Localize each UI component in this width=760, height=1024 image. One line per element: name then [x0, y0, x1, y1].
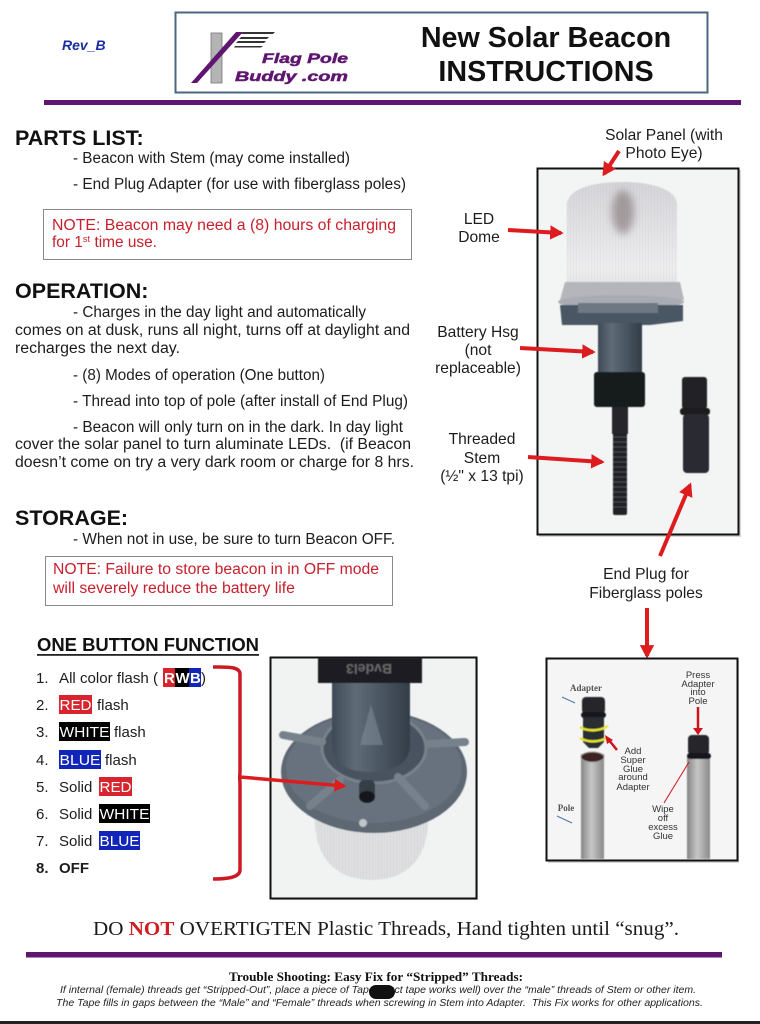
lens [315, 820, 428, 880]
note: charging: time use. [90, 234, 157, 251]
small labels: Pole [688, 696, 708, 707]
mode 1 [36, 668, 206, 687]
small arrows [557, 697, 703, 823]
troubleshooting: The Tape fills in gaps between the “Male” and “Female” threads when screwing in Stem into Adapter. This Fix works for other applications. [56, 997, 703, 1009]
mode 6: 6. [36, 806, 49, 823]
list: button modes [36, 668, 206, 877]
mode 8: 8. [36, 860, 49, 877]
mode 1: B [190, 670, 201, 687]
mode 1: ) [201, 670, 206, 687]
section: operation [15, 279, 414, 471]
label: battery housing: Battery Hsg [437, 324, 519, 341]
threaded stem [613, 433, 627, 515]
mode 6: Solid [59, 806, 92, 823]
section: operation: - Charges in the day light and automatically [73, 304, 366, 321]
right pole [687, 754, 710, 859]
troubleshooting: Trouble Shooting: Easy Fix for “Stripped” Threads: [229, 969, 523, 984]
small labels: into [690, 687, 706, 698]
collar [318, 658, 422, 683]
small labels: off [658, 813, 669, 824]
mode 4: 4. [36, 752, 49, 769]
arrow: end plug up [660, 485, 690, 556]
mode 5: 5. [36, 779, 49, 796]
section: operation: recharges the next day. [15, 340, 180, 357]
mode 7 [36, 831, 140, 850]
title: INSTRUCTIONS [438, 56, 654, 88]
redaction blob [369, 985, 395, 999]
section: parts list: - End Plug Adapter (for use with fiberglass poles) [73, 176, 406, 193]
dome [567, 182, 677, 285]
note: storage warning: NOTE: Failure to store beacon in in OFF mode [53, 561, 379, 578]
troubleshooting: If internal (female) threads get “Stripped-Out”, place a piece of Tape (Duct tape works well) over the “male” threads of Stem or other item. [60, 984, 696, 996]
arrow: end plug down [645, 608, 649, 656]
section: storage: STORAGE: [15, 506, 128, 530]
section: operation: cover the solar panel to turn aluminate LEDs. (if Beacon [15, 436, 411, 453]
label: solar panel: Solar Panel (with [605, 127, 723, 144]
label: battery housing: (not [465, 342, 492, 359]
label: threaded stem [440, 431, 524, 485]
small labels: Add [625, 746, 641, 757]
label: end plug [589, 566, 703, 602]
note: storage warning: will severely reduce the battery life [52, 580, 295, 597]
label: threaded stem: (½" x 13 tpi) [440, 468, 524, 485]
heading: one button function: ONE BUTTON FUNCTION [37, 634, 259, 655]
note: charging [44, 210, 412, 260]
mode 7: BLUE [100, 833, 140, 850]
arrow: battery housing [520, 348, 593, 352]
small labels: Adapter [681, 679, 715, 690]
small labels: Press [686, 670, 710, 681]
mode 5: RED [100, 779, 132, 796]
section: parts list: - Beacon with Stem (may come installed) [73, 150, 350, 167]
mode 8 [36, 860, 89, 877]
label: end plug: Fiberglass poles [589, 585, 703, 602]
small labels: Super [620, 755, 646, 766]
bracket [213, 667, 240, 879]
label: LED dome: Dome [458, 229, 500, 246]
small labels: around [618, 772, 648, 783]
beacon photo panel [538, 168, 741, 537]
mode 1: All color flash ( [59, 670, 158, 687]
revision label: Rev_B [62, 37, 106, 53]
collar [594, 372, 645, 407]
screw [359, 819, 367, 827]
button [359, 780, 375, 800]
mode 3: WHITE [60, 724, 110, 741]
logo: Flag Pole Buddy [191, 32, 348, 84]
base [560, 305, 683, 325]
button photo panel: Bvdel3 [346, 661, 392, 677]
mode 1: W [176, 670, 190, 687]
mode 6: WHITE [100, 806, 150, 823]
mode 7: Solid [59, 833, 92, 850]
base disc [281, 711, 467, 833]
ribs [283, 735, 465, 806]
label: end plug: End Plug for [603, 566, 689, 583]
arrow: solar panel [604, 151, 619, 174]
label: solar panel: Photo Eye) [625, 145, 703, 162]
logo: Flag Pole Buddy: Buddy .com [235, 68, 348, 84]
section: operation: comes on at dusk, runs all night, turns off at daylight and [15, 322, 410, 339]
mode 2: 2. [36, 697, 49, 714]
arrow: threaded stem [528, 457, 602, 462]
mode 5: Solid [59, 779, 92, 796]
button photo panel [270, 658, 478, 900]
small labels [558, 670, 715, 842]
section: operation: OPERATION: [15, 279, 148, 303]
small labels: Glue [623, 764, 643, 775]
mode 5 [36, 777, 132, 796]
header banner [176, 12, 708, 92]
label: battery housing: replaceable) [435, 360, 521, 377]
note: storage warning [46, 556, 392, 606]
label: threaded stem: Threaded [449, 431, 515, 448]
small labels: Pole [558, 803, 574, 813]
mode 2 [36, 695, 129, 714]
ring [322, 713, 426, 783]
pole install panel [546, 658, 739, 863]
mode 3: flash [114, 724, 146, 741]
title [421, 22, 671, 88]
logo: Flag Pole Buddy: Flag Pole [262, 50, 348, 66]
small labels: Adapter [616, 782, 650, 793]
mode 1: R [164, 670, 175, 687]
small labels: excess [648, 822, 678, 833]
small labels: Adapter [570, 683, 602, 693]
section: parts list: PARTS LIST: [15, 126, 144, 150]
mode 2: flash [97, 697, 129, 714]
note: charging: NOTE: Beacon may need a (8) hours of charging [52, 217, 396, 234]
stem [332, 680, 410, 772]
section: operation: - (8) Modes of operation (One button) [73, 367, 325, 384]
mode 4: flash [105, 752, 137, 769]
note: charging: for 1 [52, 234, 83, 251]
warning line: DO NOT OVERTIGTEN Plastic Threads, Hand tighten until “snug”. [93, 918, 679, 940]
label: threaded stem: Stem [464, 450, 500, 467]
mode 3: 3. [36, 724, 49, 741]
left pole [581, 754, 604, 859]
mode 4 [36, 750, 137, 769]
mode 7: 7. [36, 833, 49, 850]
arrow: bracket to button [240, 777, 344, 786]
troubleshooting [56, 969, 703, 1009]
section: parts list [15, 126, 406, 193]
mode 1: 1. [36, 670, 49, 687]
label: battery housing [435, 324, 521, 377]
arrow: LED dome [508, 230, 561, 233]
section: storage [15, 506, 395, 548]
section: storage: - When not in use, be sure to turn Beacon OFF. [73, 531, 395, 548]
section: operation: - Thread into top of pole (after install of End Plug) [73, 393, 408, 410]
end plug [682, 377, 707, 409]
mode 3 [36, 722, 146, 741]
adapter [582, 697, 605, 714]
mode 2: RED [60, 697, 92, 714]
label: LED dome [458, 211, 500, 246]
small labels: Wipe [652, 804, 674, 815]
section: operation: - Beacon will only turn on in the dark. In day light [73, 419, 404, 436]
title: New Solar Beacon [421, 22, 671, 54]
mode 4: BLUE [60, 752, 100, 769]
section: operation: doesn’t come on try a very dark room or charge for 8 hrs. [15, 454, 414, 471]
label: LED dome: LED [464, 211, 494, 228]
mode 6 [36, 804, 150, 823]
label: solar panel [605, 127, 723, 162]
note: charging: st [83, 234, 91, 245]
small labels: Glue [653, 831, 673, 842]
mode 8: OFF [59, 860, 89, 877]
